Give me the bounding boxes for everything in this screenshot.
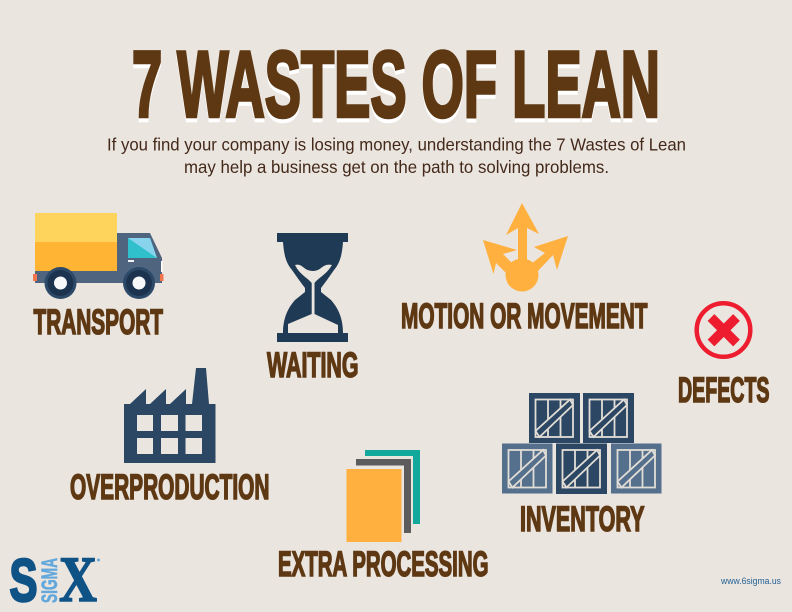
icon: defects cross	[697, 303, 750, 357]
icon: arrows	[483, 203, 568, 292]
label: extra processing: EXTRA PROCESSING	[278, 545, 488, 584]
logo: six sigma: SIGMA	[37, 558, 62, 603]
website url: www.6sigma.us	[720, 576, 781, 586]
logo: six sigma: S	[10, 547, 38, 612]
subtitle text: may help a business get on the path to solving problems.	[184, 157, 609, 177]
icon: factory	[124, 368, 216, 463]
logo: six sigma	[10, 544, 100, 612]
icon: truck	[33, 213, 164, 299]
label: inventory: INVENTORY	[520, 500, 644, 539]
label: waiting: WAITING	[267, 346, 358, 385]
icon: stacked papers	[346, 450, 420, 542]
label: overproduction: OVERPRODUCTION	[70, 468, 270, 507]
subtitle text: If you find your company is losing money, understanding the 7 Wastes of Lean	[107, 134, 686, 154]
icon: hourglass	[277, 233, 348, 342]
subtitle text	[107, 134, 686, 177]
icon: inventory crates	[502, 393, 662, 494]
label: transport: TRANSPORT	[34, 303, 163, 342]
